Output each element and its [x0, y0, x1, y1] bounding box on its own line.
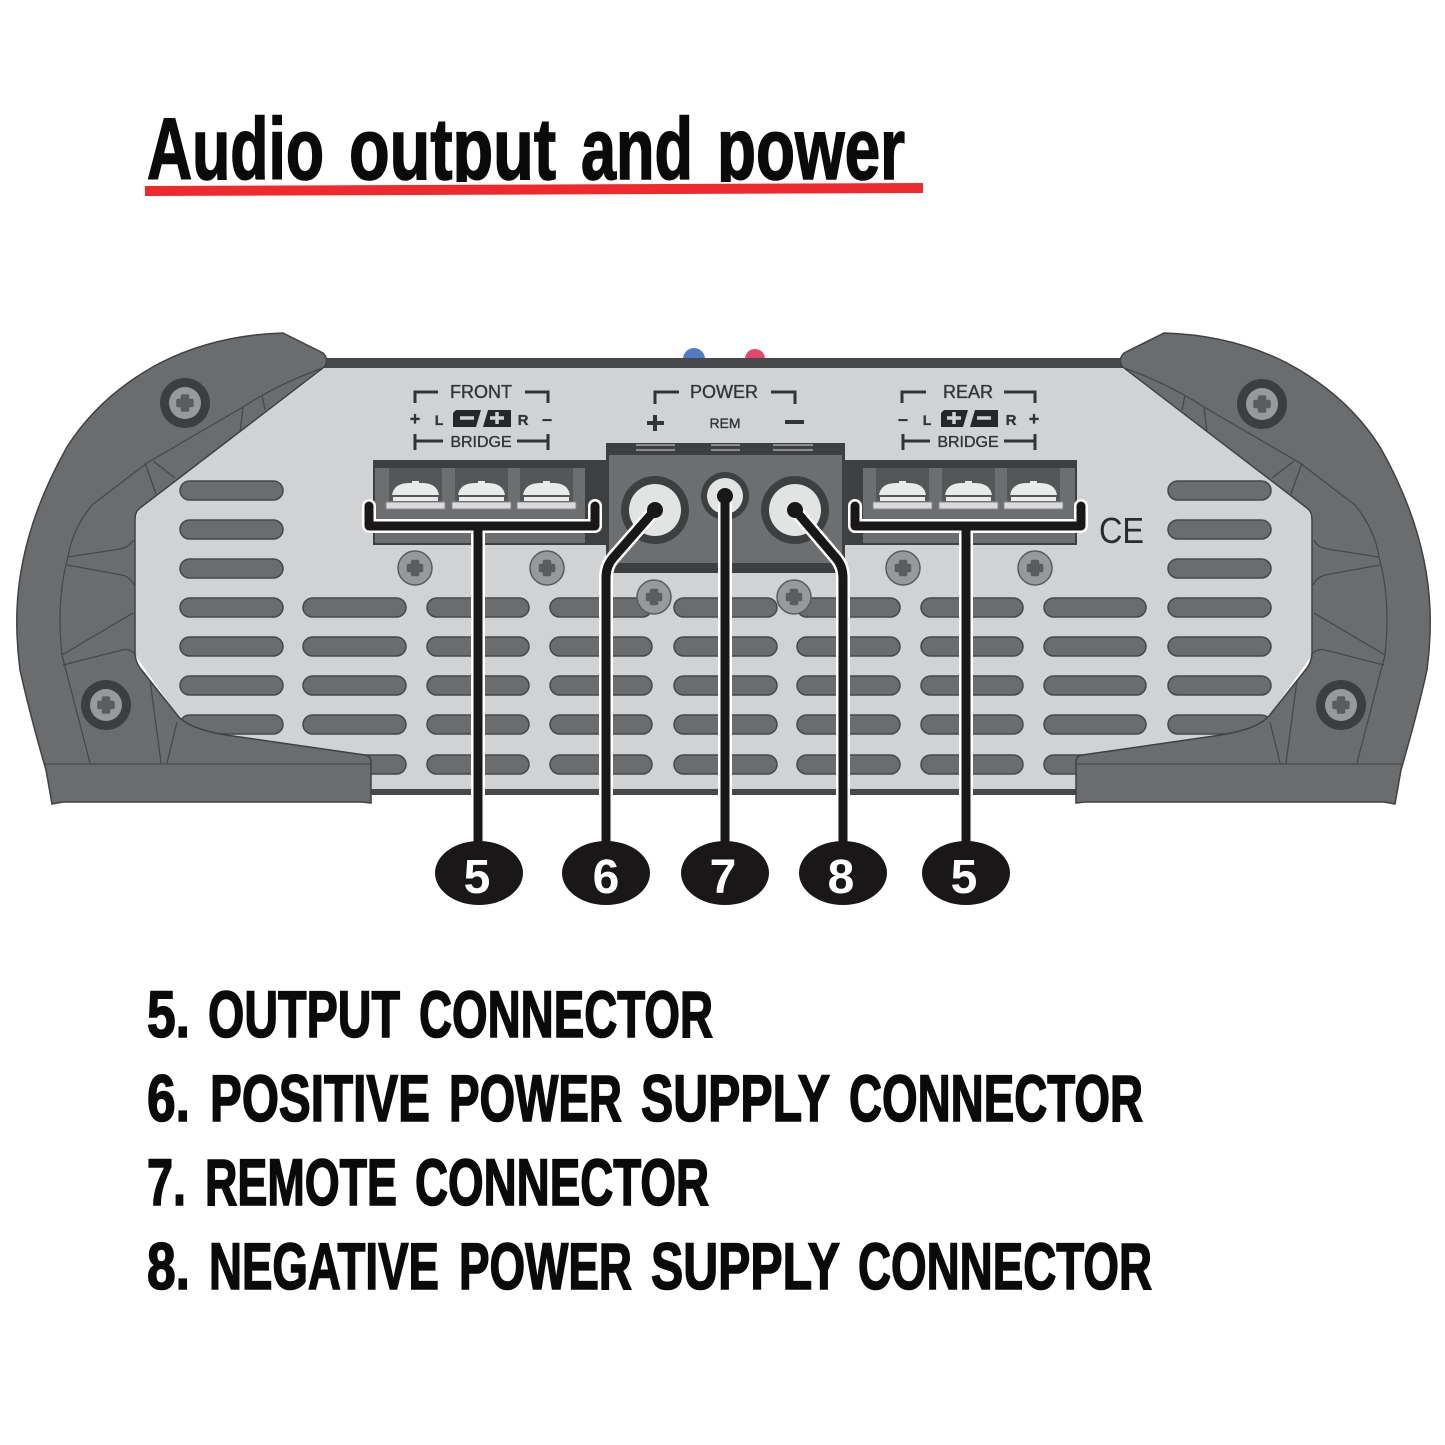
- legend list: SUPPLY: [641, 1061, 830, 1135]
- title: Audio: [147, 101, 324, 198]
- legend list: POWER: [449, 1061, 622, 1135]
- rear labels: R: [1006, 412, 1017, 429]
- front output terminal block: [373, 460, 607, 545]
- front labels: R: [518, 412, 529, 429]
- callout leader lines: [369, 488, 1081, 845]
- plate screws: [398, 551, 1052, 614]
- legend list: CONNECTOR: [419, 977, 713, 1051]
- legend list: SUPPLY: [651, 1229, 840, 1303]
- rear labels: [898, 382, 1039, 451]
- rear output terminal block: [845, 460, 1077, 545]
- front labels: FRONT: [450, 382, 512, 402]
- front labels: BRIDGE: [450, 434, 512, 451]
- rear labels: BRIDGE: [937, 434, 999, 451]
- left rubber end cap: [17, 333, 371, 804]
- number badges: 7: [710, 851, 736, 904]
- faceplate: [135, 358, 1312, 795]
- front labels: +: [410, 409, 420, 429]
- legend list: 7.: [147, 1145, 186, 1219]
- front labels: –: [542, 409, 552, 429]
- title: output: [349, 101, 556, 198]
- legend list: CONNECTOR: [858, 1229, 1152, 1303]
- legend list: CONNECTOR: [849, 1061, 1143, 1135]
- ventilation slots: [180, 481, 1271, 774]
- title: power: [717, 101, 905, 198]
- title: [145, 114, 923, 196]
- number badges: 5: [464, 851, 490, 904]
- infographic canvas: [16, 114, 1431, 1290]
- legend list: POWER: [459, 1229, 632, 1303]
- right rubber end cap: [1076, 333, 1430, 804]
- power labels: REM: [709, 415, 741, 431]
- front labels: [410, 382, 552, 451]
- power labels: [647, 382, 804, 431]
- rear labels: –: [898, 409, 908, 429]
- legend list: [147, 977, 1152, 1303]
- power labels: POWER: [690, 382, 758, 402]
- power terminal block: [606, 443, 845, 573]
- legend list: NEGATIVE: [209, 1229, 439, 1303]
- amplifier illustration: [17, 333, 1430, 905]
- corner screws: [81, 378, 1366, 730]
- legend list: OUTPUT: [208, 977, 400, 1051]
- legend list: POSITIVE: [210, 1061, 430, 1135]
- title: and: [581, 101, 693, 198]
- legend list: REMOTE: [205, 1145, 397, 1219]
- rear labels: +: [1029, 409, 1039, 429]
- rear labels: L: [923, 412, 932, 428]
- legend list: 5.: [147, 977, 190, 1051]
- number badges: 6: [593, 851, 619, 904]
- front labels: L: [435, 412, 444, 428]
- number badges: 8: [828, 851, 854, 904]
- legend list: 6.: [147, 1061, 190, 1135]
- rear labels: REAR: [943, 382, 993, 402]
- legend list: 8.: [147, 1229, 190, 1303]
- terminal knobs: [683, 348, 765, 370]
- number badges: [435, 841, 1010, 905]
- number badges: 5: [951, 851, 977, 904]
- legend list: CONNECTOR: [415, 1145, 709, 1219]
- CE mark: CE: [1099, 510, 1144, 551]
